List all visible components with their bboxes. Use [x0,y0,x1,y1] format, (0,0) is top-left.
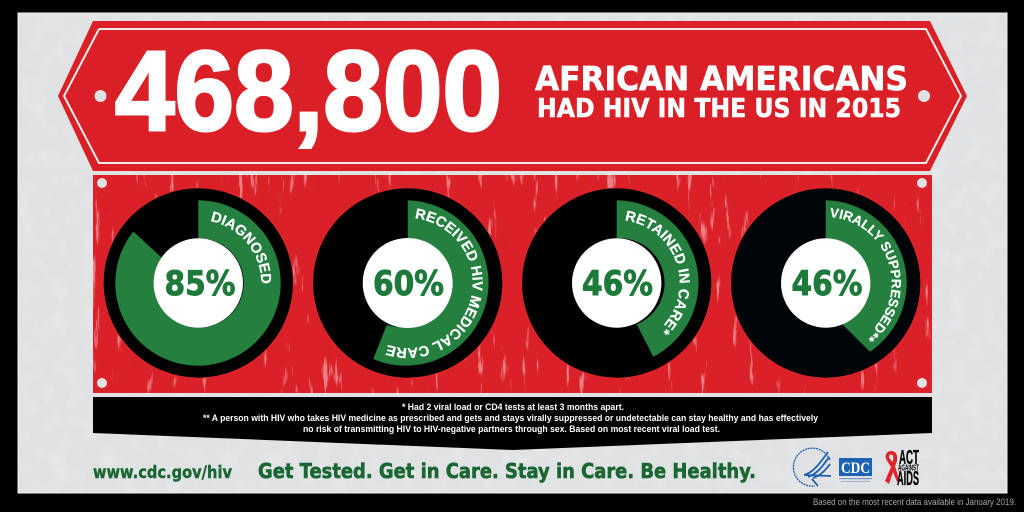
footnotes band: no risk of transmitting HIV to HIV-negative partners through sex. Based on most recent viral load test. [303,424,720,435]
headline text [535,59,908,124]
donut: virally suppressed 46%: VIRALLY SUPPRESSED** [830,208,901,342]
donut: diagnosed 85%: 85% [164,264,236,304]
tagline: Get Tested. Get in Care. Stay in Care. Be Healthy. [258,459,756,483]
logo: Act Against AIDS: AGAINST [898,464,919,472]
banner shape [58,21,967,171]
donut: retained in care 46% [522,188,712,378]
footnotes band [93,397,932,450]
big number: 468,800 [115,28,502,154]
donut: received HIV medical care 60%: RECEIVED HIV MEDICAL CARE [386,208,483,358]
donut: virally suppressed 46% [730,188,921,378]
donut: diagnosed 85% [103,188,294,378]
banner: headline [58,21,967,171]
donut: virally suppressed 46%: 46% [792,264,862,304]
logo: HHS seal [793,448,831,486]
donut: retained in care 46%: 46% [582,264,653,304]
text: AIDS [897,468,919,490]
donut: received HIV medical care 60% [312,188,503,378]
headline text: HAD HIV IN THE US IN 2015 [537,94,901,124]
icon: red ribbon [885,451,899,484]
footnotes band: * Had 2 viral load or CD4 tests at least 3 months apart. [402,402,624,413]
text: ACT [899,447,919,469]
donut: retained in care 46%: RETAINED IN CARE* [626,210,690,336]
footnotes band: ** A person with HIV who takes HIV medicine as prescribed and gets and stays virally suppressed or undetectable can stay healthy and has effectively [203,413,819,424]
donut: diagnosed 85%: DIAGNOSED [211,211,272,284]
donut: received HIV medical care 60%: 60% [373,264,444,304]
panel: care continuum [93,175,932,393]
logo: CDC [839,458,872,482]
headline text: AFRICAN AMERICANS [535,59,908,98]
website link: www.cdc.gov/hiv [93,463,232,482]
logo: Act Against AIDS [885,447,919,490]
logo: CDC: CDC [841,460,870,477]
